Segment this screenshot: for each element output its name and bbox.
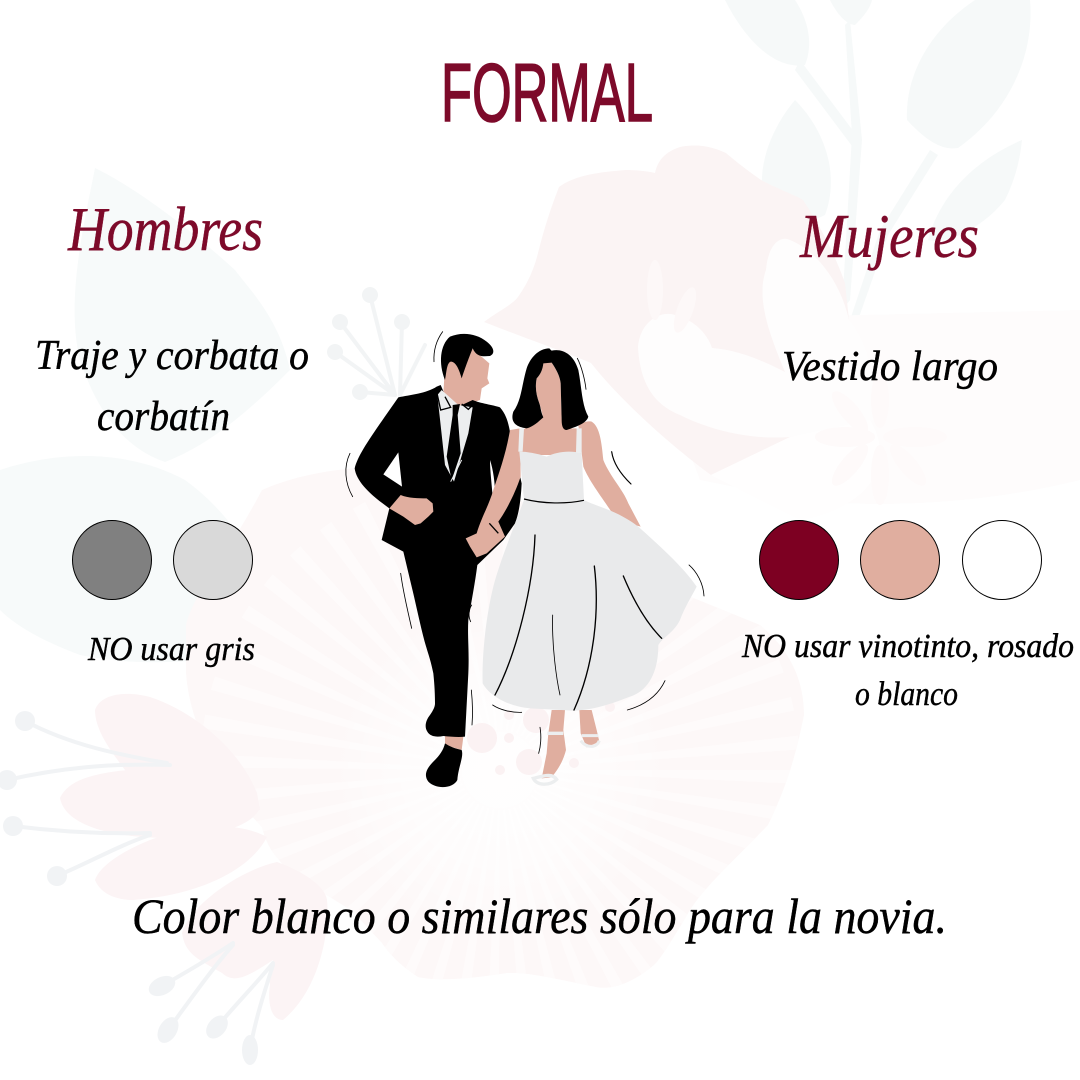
woman right leg xyxy=(579,710,599,747)
color swatches: men xyxy=(72,520,252,600)
man ankle xyxy=(445,732,464,750)
man suit xyxy=(355,385,522,737)
woman left arm and hand xyxy=(466,428,521,557)
arm gap xyxy=(383,452,402,487)
dress straps xyxy=(518,428,582,453)
tie xyxy=(447,404,461,480)
collar lines xyxy=(437,392,473,410)
stamen left xyxy=(0,711,273,1065)
pink petals bottom left xyxy=(60,694,327,1020)
text block: women attire: Vestido largo xyxy=(782,344,998,390)
woman xyxy=(466,348,697,784)
faint tint right xyxy=(640,310,1080,504)
large bottom flower xyxy=(186,466,804,988)
heading: Hombres: Hombres xyxy=(67,196,263,264)
white petal xyxy=(711,420,880,520)
dress folds xyxy=(495,535,662,710)
pink blob top right xyxy=(484,146,860,475)
heading: Mujeres: Mujeres xyxy=(799,203,979,271)
woman hair xyxy=(512,348,588,430)
pale daisy xyxy=(647,260,947,505)
note: women colors: o blanco xyxy=(855,676,958,713)
title: FORMAL xyxy=(441,46,653,139)
left leaves xyxy=(0,168,290,662)
waist line xyxy=(524,499,584,503)
note: women colors xyxy=(741,628,1074,713)
text block: men attire: Traje y corbata o xyxy=(35,333,309,379)
man skin xyxy=(443,347,489,407)
woman face xyxy=(536,362,562,420)
dress xyxy=(483,452,697,711)
top right leaves xyxy=(725,0,1031,320)
man xyxy=(355,334,522,787)
man hair xyxy=(441,334,493,380)
man shoe xyxy=(426,743,462,787)
note: men colors: NO usar gris xyxy=(87,631,255,668)
color swatches: women xyxy=(760,520,1042,600)
flower rays xyxy=(330,600,670,940)
white flower xyxy=(638,239,875,438)
jacket sliver xyxy=(490,460,495,497)
lapel highlight xyxy=(451,460,462,482)
footer note: Color blanco o similares sólo para la novia. xyxy=(132,888,947,944)
text block: men attire: corbatín xyxy=(97,394,230,440)
right shoe xyxy=(581,736,599,746)
man hand xyxy=(389,495,433,525)
text block: men attire xyxy=(35,333,309,440)
motion lines xyxy=(346,332,704,753)
shirt xyxy=(437,390,473,482)
woman left leg xyxy=(542,710,566,778)
woman right arm xyxy=(578,421,641,527)
woman shoes xyxy=(533,733,563,784)
illustration: couple xyxy=(346,332,704,787)
petal dots near feet xyxy=(467,702,615,775)
finger line xyxy=(489,523,498,533)
stamen center xyxy=(329,289,425,398)
woman chest xyxy=(519,415,582,455)
